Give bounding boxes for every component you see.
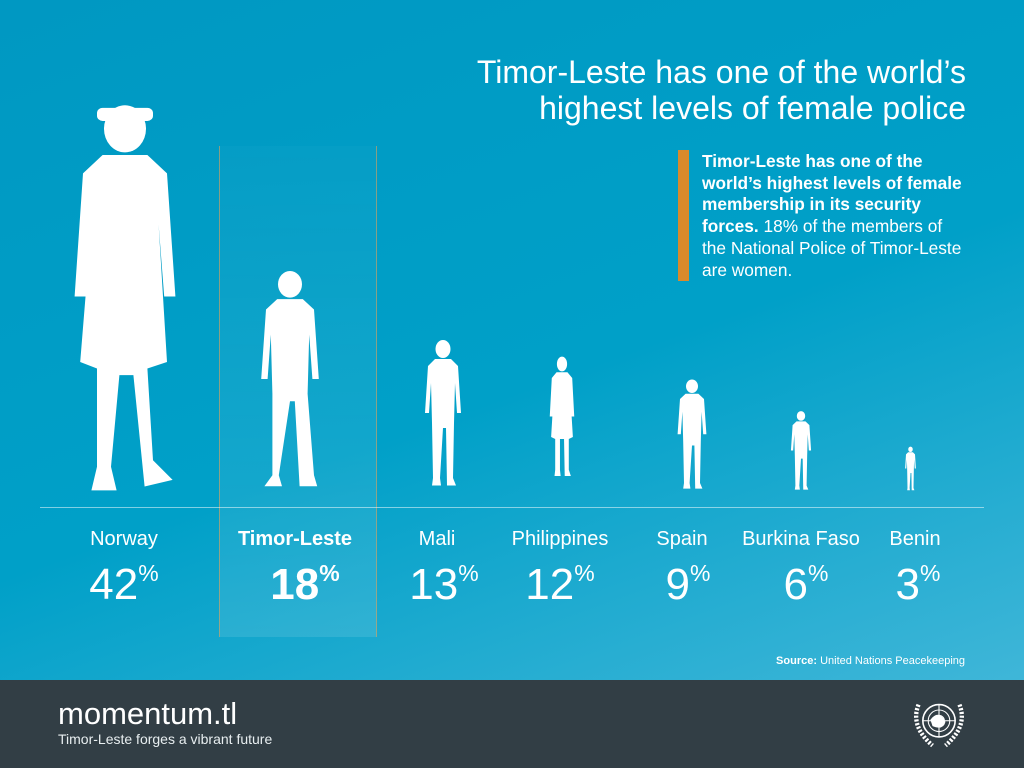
tagline: Timor-Leste forges a vibrant future <box>58 731 272 747</box>
label: Burkina Faso: Burkina Faso <box>742 528 860 550</box>
description text <box>702 151 962 280</box>
orange bar <box>678 150 689 281</box>
value: Philippines: 12% <box>525 560 595 609</box>
footer <box>0 680 1024 768</box>
figure: Philippines <box>550 357 574 476</box>
value: Mali: 13% <box>409 560 479 609</box>
label: Norway: Norway <box>90 528 158 550</box>
figure: Burkina Faso <box>791 411 811 490</box>
description text: are women. <box>702 260 792 280</box>
value: Spain: 9% <box>666 560 710 609</box>
description text: world’s highest levels of female <box>702 173 962 193</box>
figure: Mali <box>425 340 461 486</box>
value: Burkina Faso: 6% <box>784 560 828 609</box>
highlight column: Timor-Leste <box>219 146 377 637</box>
label: Spain: Spain <box>656 528 708 550</box>
value: Timor-Leste: 18% <box>270 560 340 609</box>
description text: Timor-Leste has one of the <box>702 151 923 171</box>
value: Benin: 3% <box>896 560 940 609</box>
label: Timor-Leste: Timor-Leste <box>238 528 352 550</box>
brand: momentum.tl <box>58 696 237 731</box>
figure: Benin <box>905 447 916 490</box>
value: Norway: 42% <box>89 560 159 609</box>
baseline <box>40 507 984 508</box>
title: Timor-Leste has one of the world’s highest levels of female police <box>477 54 966 126</box>
figure: Norway <box>75 105 175 490</box>
description text: membership in its security <box>702 194 921 214</box>
source: Source: United Nations Peacekeeping <box>776 655 965 667</box>
label: Benin: Benin <box>889 528 941 550</box>
label: Mali: Mali <box>419 528 455 550</box>
description text: forces. 18% of the members of <box>702 216 942 236</box>
figure: Timor-Leste <box>261 271 319 486</box>
figure: Spain <box>678 380 706 489</box>
label: Philippines: Philippines <box>512 528 608 550</box>
icon: UN emblem <box>914 704 964 748</box>
description text: the National Police of Timor-Leste <box>702 238 961 258</box>
